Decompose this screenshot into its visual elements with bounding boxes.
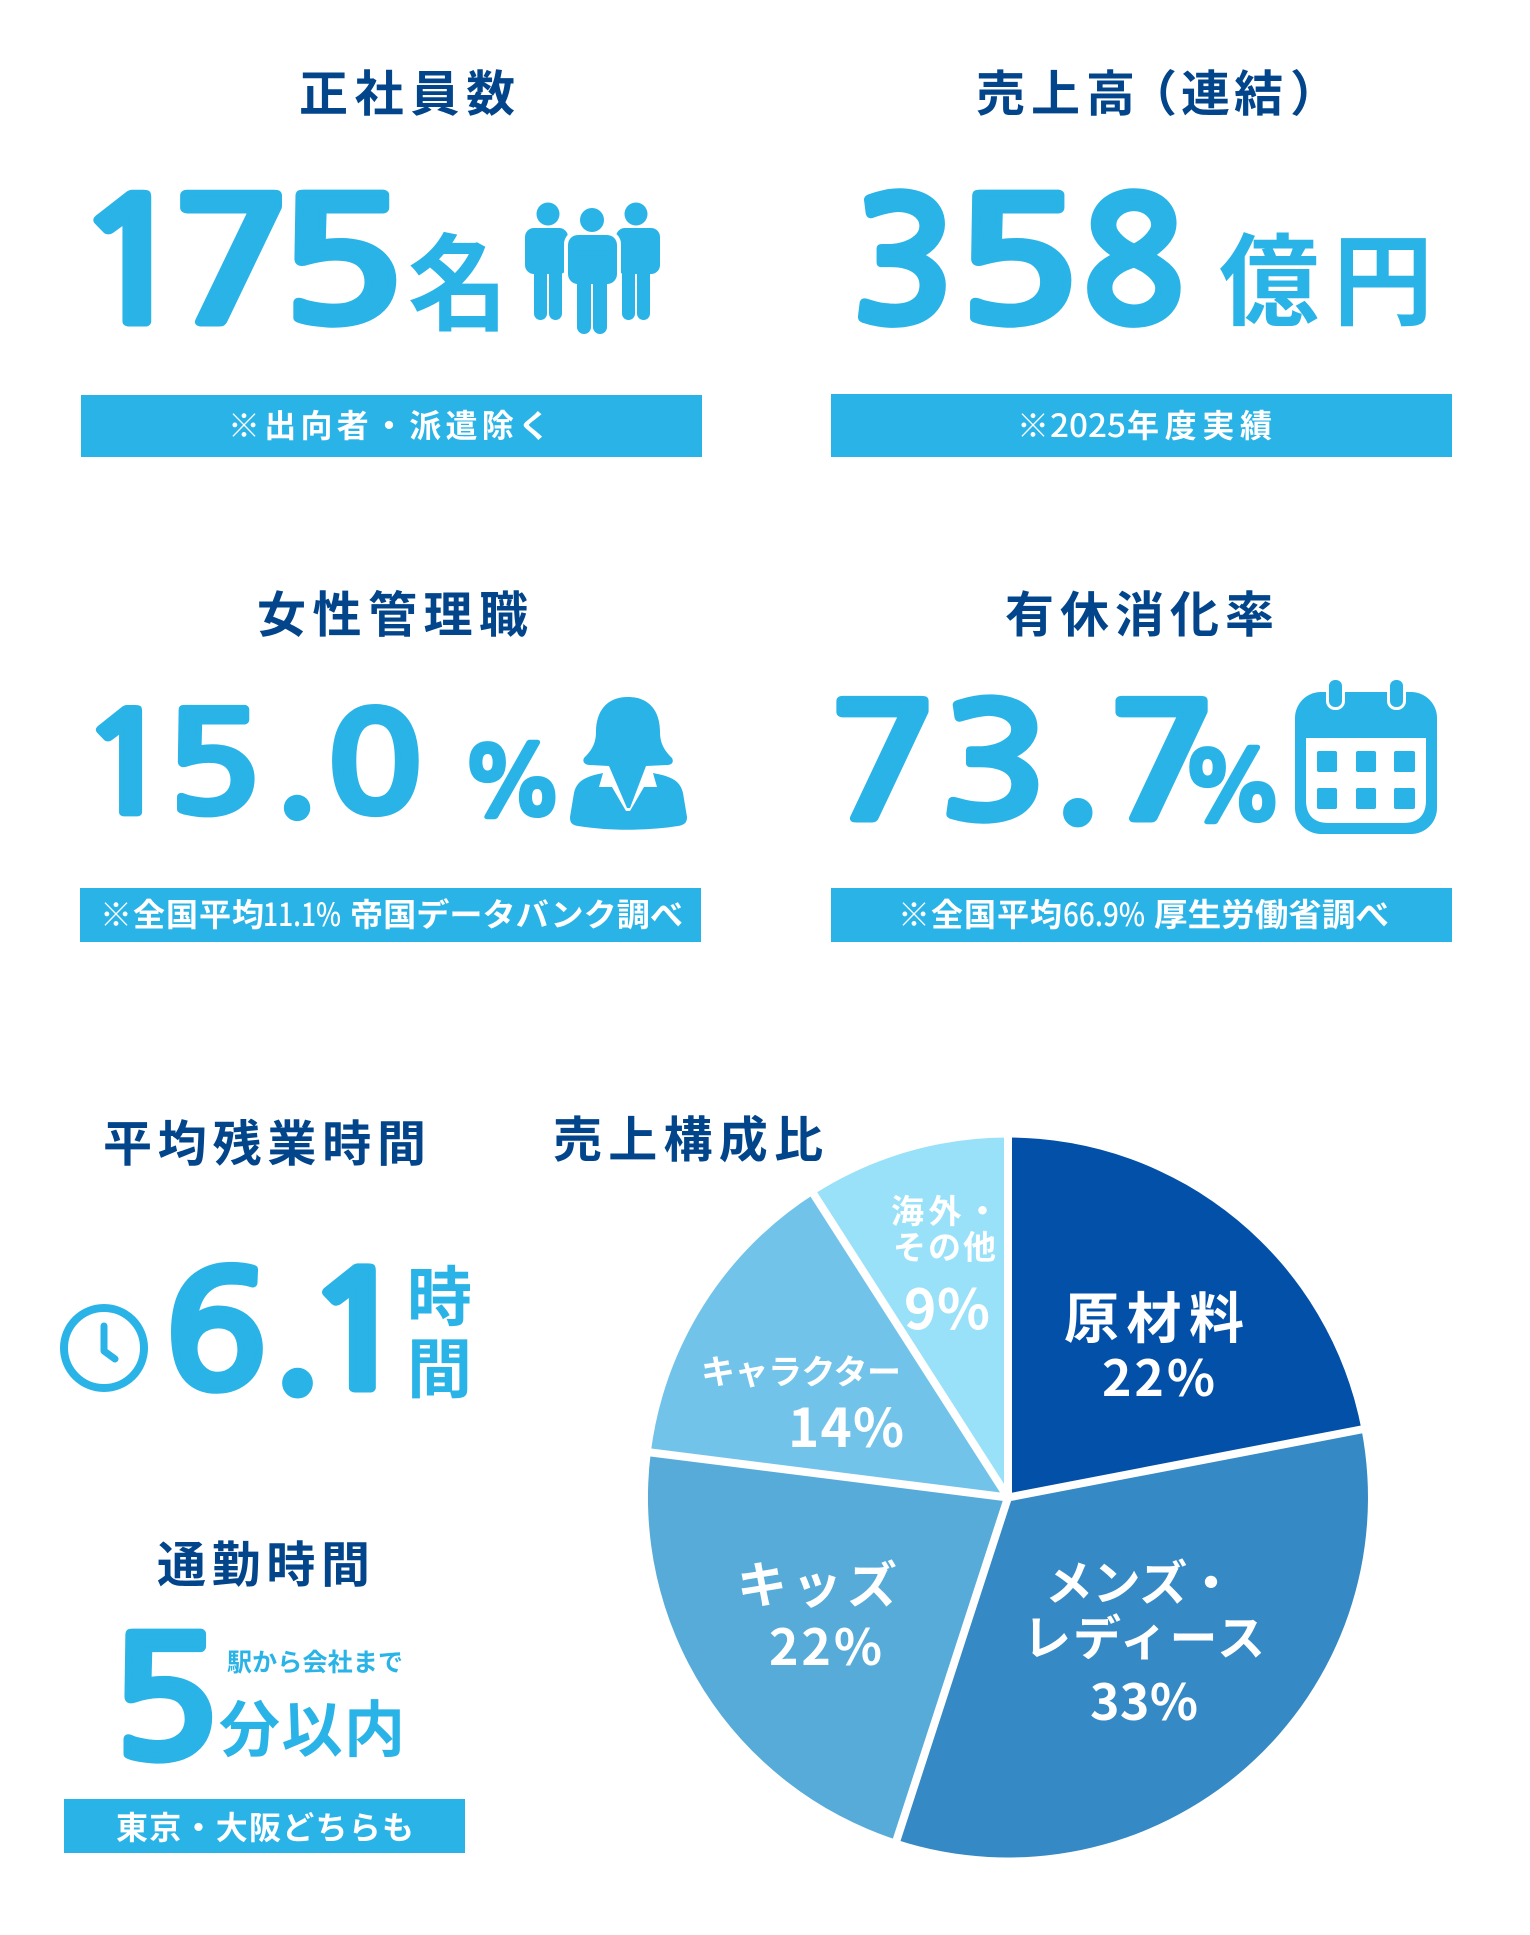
note bar: employees: ※出向者・派遣除く <box>228 401 550 447</box>
note bar: female managers: 11.1% <box>263 890 341 936</box>
number: 6.1: 1 <box>301 1254 415 1414</box>
number: 15.0: 15 <box>78 696 262 835</box>
number: 175: 1 <box>71 179 194 350</box>
unit: hours <box>407 1245 472 1411</box>
number: 175 <box>71 179 407 350</box>
label: raw materials: 22% <box>1102 1339 1215 1411</box>
icon: clock <box>64 1308 144 1388</box>
note bar: paid leave <box>831 888 1452 942</box>
note bar: employees <box>81 395 702 457</box>
note bar: female managers <box>80 888 701 942</box>
caption: from station: 駅から会社まで <box>227 1643 403 1679</box>
label: overseas other <box>891 1185 999 1345</box>
unit: hours: 時 <box>407 1245 472 1339</box>
number: 358: 3 <box>851 178 957 349</box>
label: mens ladies: 33% <box>1090 1663 1198 1735</box>
label: character: 14% <box>788 1387 904 1463</box>
label: mens ladies <box>1023 1544 1265 1735</box>
note bar: revenue: ※ <box>1017 401 1049 447</box>
heading: employees: 正社員数 <box>299 55 515 126</box>
number: 73.7 <box>827 680 1219 844</box>
number: 5: 5 <box>109 1618 221 1785</box>
label: raw materials: 原材料 <box>1064 1274 1244 1354</box>
number: 73.7: 7 <box>1106 684 1219 844</box>
panel: sales composition <box>553 1101 1369 1857</box>
number: 358: 5 <box>953 178 1081 349</box>
number: 175: 7 <box>171 179 294 350</box>
panel: female managers <box>78 576 701 942</box>
unit: percent: % <box>460 737 565 831</box>
number: 358 <box>851 178 1185 349</box>
number: 6.1 <box>163 1250 415 1414</box>
heading: female managers: 女性管理職 <box>257 576 528 647</box>
note bar: revenue <box>831 394 1452 457</box>
heading: overtime: 平均残業時間 <box>103 1105 426 1176</box>
panel: paid leave <box>827 576 1452 942</box>
label: kids <box>737 1546 897 1680</box>
unit: hours: 間 <box>407 1317 472 1411</box>
panel: revenue <box>831 55 1452 457</box>
label: kids: 22% <box>769 1608 882 1680</box>
heading: revenue: ） <box>1290 55 1339 126</box>
heading: revenue: （ <box>1128 55 1177 126</box>
label: character <box>701 1345 904 1463</box>
note bar: female managers: 帝国データバンク調べ <box>350 890 683 936</box>
label: overseas other: その他 <box>893 1221 996 1269</box>
panel: overtime <box>64 1105 472 1414</box>
label: character: キャラクター <box>701 1345 901 1394</box>
heading: revenue: 連結 <box>1181 55 1283 126</box>
number: 15.0: . <box>275 692 317 830</box>
number: 6.1: 6 <box>163 1253 268 1413</box>
unit: oku yen: 億円 <box>1219 201 1433 346</box>
unit: percent: % <box>1180 742 1285 836</box>
note bar: revenue: 年度実績 <box>1127 401 1272 447</box>
label: mens ladies: メンズ・ <box>1045 1544 1235 1614</box>
pie chart <box>643 1130 1369 1857</box>
note bar: revenue: 2025 <box>1050 401 1126 447</box>
number: 6.1: . <box>272 1250 321 1410</box>
number: 73.7: 73 <box>827 684 1051 844</box>
label: overseas other: 海外・ <box>891 1185 999 1233</box>
number: 15.0 <box>78 692 424 835</box>
number: 175: 5 <box>276 179 407 350</box>
unit: people: 名 <box>408 201 508 353</box>
icon: calendar <box>1295 678 1437 834</box>
number: 73.7: . <box>1053 680 1101 838</box>
icon: three people <box>525 202 660 334</box>
number: 358: 8 <box>1081 178 1185 349</box>
heading: revenue: 売上高 <box>976 55 1135 126</box>
panel: employees <box>71 55 702 457</box>
heading: paid leave: 有休消化率 <box>1005 576 1274 647</box>
label: kids: キッズ <box>737 1546 897 1618</box>
number: 15.0: 0 <box>326 696 424 835</box>
heading: sales composition: 売上構成比 <box>553 1101 823 1172</box>
heading: commute: 通勤時間 <box>157 1526 370 1597</box>
unit: within minutes: 分以内 <box>219 1680 405 1769</box>
label: overseas other: 9% <box>904 1265 990 1345</box>
heading: revenue <box>976 55 1339 126</box>
note bar: commute: 東京・大阪どちらも <box>116 1803 414 1849</box>
note bar: paid leave: 66.9% <box>1063 890 1145 936</box>
icon: businesswoman <box>570 697 687 830</box>
note bar: paid leave: 厚生労働省調べ <box>1154 890 1389 936</box>
note bar: commute <box>64 1799 465 1853</box>
label: mens ladies: レディース <box>1023 1599 1265 1669</box>
note bar: female managers: ※全国平均 <box>100 890 264 936</box>
label: raw materials <box>1064 1274 1244 1411</box>
note bar: paid leave: ※全国平均 <box>898 890 1062 936</box>
panel: commute <box>64 1526 465 1853</box>
